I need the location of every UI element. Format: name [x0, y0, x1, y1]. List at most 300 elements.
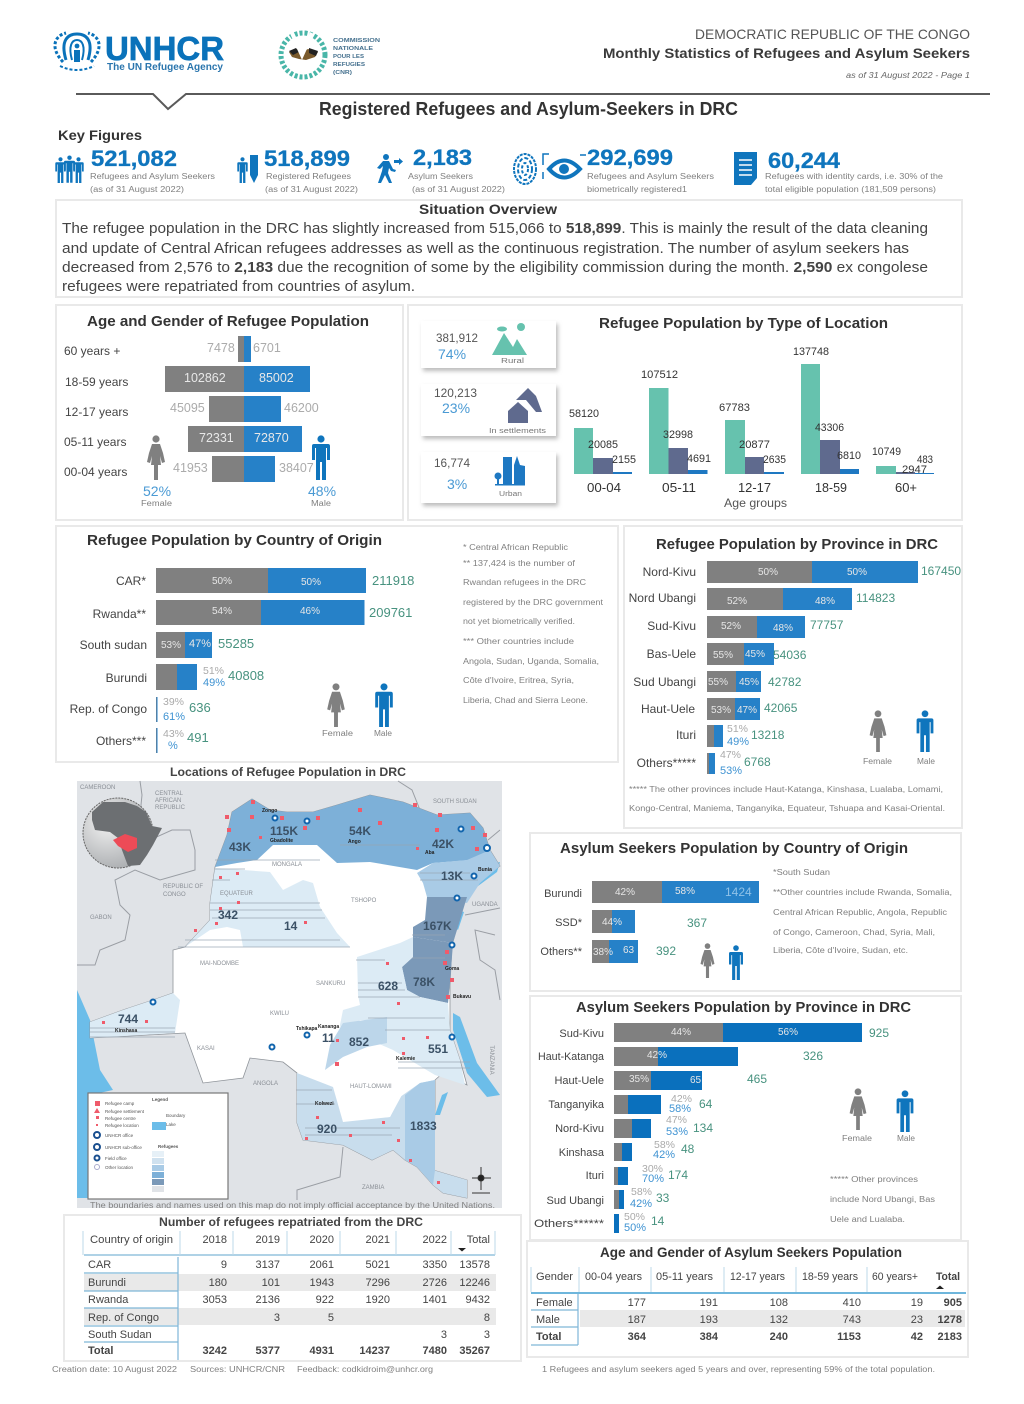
bar chart	[70, 568, 414, 753]
values: 174	[668, 1168, 688, 1182]
pyramid values: 72331	[199, 431, 234, 445]
table rows: 3	[274, 1312, 280, 1324]
table rows: 1943	[310, 1277, 334, 1289]
table totals: 14237	[359, 1345, 390, 1357]
card: rural	[421, 321, 558, 371]
table	[531, 1267, 966, 1345]
age group axis: 00-04	[587, 480, 621, 495]
key figure: identity cards: 60,244	[768, 148, 841, 173]
card: rural: 74%	[438, 346, 466, 362]
heading: situation overview: Situation Overview	[419, 201, 557, 217]
country borders	[77, 781, 500, 1200]
table header: 60 years+	[872, 1271, 918, 1283]
percentages: 39%	[163, 696, 184, 708]
table rows: 108	[770, 1297, 788, 1309]
footer	[52, 1365, 433, 1374]
country and province names: TSHOPO	[351, 898, 377, 904]
percentages: 51%	[203, 665, 224, 677]
table rows: 384	[700, 1331, 719, 1343]
row labels: Haut-Uele	[554, 1075, 604, 1087]
age labels: 60 years +	[64, 344, 120, 358]
heading: Number of refugees repatriated from the DRC	[159, 1215, 423, 1229]
row labels: Sud Ubangi	[546, 1195, 604, 1207]
footnote: include Nord Ubangi, Bas	[830, 1195, 935, 1204]
age labels: 00-04 years	[64, 465, 127, 479]
map legend	[88, 1093, 228, 1199]
table rows: 2183	[938, 1331, 962, 1343]
key figure: asylum seekers: Asylum Seekers	[408, 172, 473, 181]
key figure: refugees	[237, 146, 358, 194]
pyramid values: 45095	[170, 401, 205, 415]
card: urban: Urban	[499, 491, 522, 498]
gender icons	[700, 943, 743, 980]
values: 42065	[764, 701, 798, 715]
percentages: 53%	[666, 1126, 688, 1138]
site names: Aba	[425, 850, 435, 856]
table header: Total	[467, 1234, 490, 1246]
site names: Bunia	[478, 867, 492, 873]
bar values: 4691	[687, 453, 711, 465]
card: in settlements: 120,213	[434, 386, 477, 400]
table rows: 5021	[366, 1259, 390, 1271]
values: 64	[699, 1097, 713, 1111]
country and province names: AFRICAN	[155, 798, 181, 804]
age group axis	[587, 480, 917, 510]
pyramid values: 46200	[284, 401, 319, 415]
key figure: total: Refugees and Asylum Seekers	[90, 172, 215, 181]
values: 925	[869, 1026, 889, 1040]
key figure: asylum seekers	[377, 145, 505, 194]
site names: Kinshasa	[115, 1028, 137, 1034]
footnote: Kongo-Central, Maniema, Tanganyika, Equateur, Tshuapa and Kasai-Oriental.	[629, 804, 945, 813]
bar chart	[629, 561, 961, 777]
table totals: 4931	[310, 1345, 334, 1357]
row labels: Sud Ubangi	[633, 675, 696, 689]
table rows: 132	[770, 1314, 788, 1326]
percentages	[161, 576, 321, 752]
population labels: 11	[322, 1031, 335, 1045]
table rows: Burundi	[88, 1277, 126, 1289]
table header: 18-59 years	[802, 1271, 858, 1283]
compass	[472, 1167, 491, 1193]
footnote	[830, 1175, 935, 1224]
population labels: 920	[317, 1122, 337, 1136]
map legend: Legend	[152, 1097, 168, 1102]
table rows: 3137	[256, 1259, 280, 1271]
table rows: South Sudan	[88, 1329, 152, 1341]
percentages: 58%	[669, 1103, 691, 1115]
percentages: 42%	[647, 1050, 667, 1061]
CNR name: (CNR)	[333, 70, 352, 76]
header text: Monthly Statistics of Refugees and Asylum Seekers	[603, 45, 970, 61]
gender shares: 48%	[308, 483, 336, 499]
percentages: 47%	[737, 705, 757, 716]
country and province names: GABON	[90, 915, 112, 921]
population labels: 115K	[270, 824, 298, 838]
table totals: 7480	[423, 1345, 447, 1357]
pyramid values: 102862	[184, 371, 226, 385]
gender legend	[842, 1088, 916, 1143]
icon: walking person	[377, 154, 403, 183]
table rows: 2061	[310, 1259, 334, 1271]
percentages: 42%	[653, 1149, 675, 1161]
percentages and values: 38%	[593, 947, 613, 958]
gender shares: Female	[141, 499, 173, 508]
gender legend	[863, 710, 936, 766]
percentages and values: 367	[687, 916, 707, 930]
population labels: 744	[118, 1012, 138, 1026]
country and province names: REPUBLIC OF	[163, 884, 203, 890]
footnotes: * Central African Republic	[463, 543, 568, 552]
values	[744, 564, 961, 769]
percentages: 50%	[847, 567, 867, 578]
age labels: 18-59 years	[65, 375, 128, 389]
row labels	[70, 574, 147, 748]
population labels: 628	[378, 979, 398, 993]
percentages: 55%	[713, 650, 733, 661]
values: 465	[747, 1072, 767, 1086]
percentages and values: 1424	[725, 885, 752, 899]
pyramid values: 6701	[253, 341, 281, 355]
heading: Age and Gender of Asylum Seekers Population	[600, 1244, 902, 1260]
table rows: 42	[911, 1331, 923, 1343]
table rows: 193	[700, 1314, 718, 1326]
population labels: 54K	[349, 824, 371, 838]
row labels: Others***	[96, 734, 146, 748]
age group axis: 18-59	[815, 480, 847, 495]
country and province names: KWILU	[270, 1011, 289, 1017]
table header: 2021	[366, 1234, 390, 1246]
gender shares	[141, 483, 336, 508]
icon: city	[494, 456, 525, 486]
table rows: 2726	[423, 1277, 447, 1289]
values: 211918	[372, 573, 414, 588]
table totals: 35267	[459, 1345, 490, 1357]
row labels: Kinshasa	[559, 1147, 605, 1159]
card: in settlements	[421, 384, 558, 439]
values: 491	[187, 730, 209, 745]
UNHCR logo	[55, 30, 224, 73]
values: 54036	[773, 648, 807, 662]
map legend: Refugees	[158, 1144, 179, 1149]
table rows: 3	[441, 1329, 447, 1341]
country and province names: CENTRAL	[155, 791, 184, 797]
table rows: 240	[770, 1331, 788, 1343]
gender legend: Male	[374, 729, 393, 738]
percentages: 51%	[727, 723, 748, 735]
percentages: 50%	[624, 1222, 646, 1234]
bar chart	[540, 881, 759, 963]
heading: Asylum Seekers Population by Country of Origin	[560, 840, 908, 857]
values: 114823	[856, 591, 895, 605]
icon: fingerprint	[514, 154, 536, 184]
table rows: 2136	[256, 1294, 280, 1306]
panel: asylum seekers by province	[530, 996, 961, 1240]
row labels: Nord-Kivu	[555, 1123, 604, 1135]
values: 77757	[810, 618, 844, 632]
sud-kivu	[402, 937, 453, 1003]
table header	[90, 1234, 490, 1252]
site names: Tshikapa	[296, 1026, 318, 1032]
ituri	[417, 850, 500, 903]
percentages: 65	[690, 1075, 702, 1086]
table rows: 364	[628, 1331, 647, 1343]
panel: asylum seekers by country of origin	[530, 833, 961, 991]
values: 134	[693, 1121, 713, 1135]
icon: document	[734, 152, 757, 185]
CNR name	[333, 38, 380, 76]
situation text: decreased from 2,576 to 2,183 due the recognition of some by the eligibility commission during the month. 2,590 ex congolese	[62, 259, 928, 276]
table header	[536, 1271, 960, 1289]
footnotes	[773, 868, 952, 955]
percentages and values: 44%	[602, 917, 622, 928]
row labels: Haut-Uele	[641, 702, 695, 716]
card: in settlements: 23%	[442, 400, 470, 416]
map: refugee locations	[77, 781, 502, 1210]
site names: Bukavu	[453, 994, 471, 1000]
key figure: total: (as of 31 August 2022)	[90, 185, 184, 194]
percentages: 35%	[629, 1074, 649, 1085]
row labels: Others******	[534, 1218, 605, 1230]
row labels: Nord Ubangi	[629, 591, 696, 605]
table rows: 23	[911, 1314, 923, 1326]
icon: people	[55, 155, 84, 183]
population labels: 1833	[410, 1119, 437, 1133]
values: 42782	[768, 675, 802, 689]
footer: Creation date: 10 August 2022	[52, 1365, 178, 1374]
row labels: Nord-Kivu	[643, 565, 696, 579]
population labels: 852	[349, 1035, 369, 1049]
gender legend: Female	[842, 1134, 873, 1143]
row labels	[534, 1028, 605, 1230]
percentages: 52%	[721, 621, 741, 632]
table rows: Male	[536, 1314, 560, 1326]
DRC outline	[90, 795, 500, 1198]
icon: mountains	[492, 323, 527, 355]
gender legend: Female	[863, 757, 893, 766]
sankuru	[325, 1017, 387, 1070]
percentages: 30%	[642, 1163, 663, 1175]
percentages: 56%	[778, 1027, 798, 1038]
footnotes: not yet biometrically verified.	[463, 617, 575, 626]
table rows: 1920	[366, 1294, 390, 1306]
row labels: Sud-Kivu	[559, 1028, 604, 1040]
bar chart: location by age group	[569, 346, 934, 510]
UNHCR wordmark: UNHCR	[105, 30, 224, 67]
gender legend: Male	[917, 757, 936, 766]
table header: 00-04 years	[585, 1271, 642, 1283]
percentages: 42%	[630, 1198, 652, 1210]
percentages: 49%	[727, 736, 749, 748]
card: in settlements: In settlements	[489, 428, 547, 435]
country and province names: HAUT-LOMAMI	[350, 1084, 392, 1090]
panel: age and gender of refugee population	[56, 305, 403, 520]
population labels: 43K	[229, 840, 251, 854]
percentages: 43%	[163, 728, 184, 740]
table rows: 187	[628, 1314, 646, 1326]
icon: registered refugee	[237, 155, 258, 183]
bar values: 2947	[902, 464, 927, 476]
footnotes: registered by the DRC government	[463, 598, 604, 607]
country and province names: KASAI	[197, 1046, 215, 1052]
site names: Zongo	[262, 808, 277, 814]
country and province names: ANGOLA	[253, 1081, 278, 1087]
table rows: CAR	[88, 1259, 111, 1271]
bar values: 20085	[588, 439, 618, 451]
values: 14	[651, 1214, 665, 1228]
percentages: 61%	[163, 711, 185, 723]
CNR name: REFUGIES	[333, 62, 365, 68]
values: 40808	[228, 668, 264, 683]
table header: Total	[936, 1271, 960, 1283]
pyramid values	[170, 341, 319, 475]
key figure: biometrically registered: 292,699	[587, 145, 673, 170]
situation text: and update of Central African refugees addresses as well as the continuous registration. The number of asylum seekers has	[62, 240, 909, 257]
key figure: total	[55, 146, 215, 194]
map legend: Refugee camp	[105, 1101, 135, 1106]
row labels	[540, 888, 583, 958]
panel: refugee population by type of location	[408, 305, 962, 520]
footnotes: Liberia, Côte d'Ivoire, Sudan, etc.	[773, 946, 908, 955]
heading: Refugee Population by Country of Origin	[87, 532, 382, 549]
table header: 2022	[423, 1234, 447, 1246]
percentages and values: 392	[656, 944, 676, 958]
footnote	[629, 785, 945, 813]
percentages and values: 58%	[675, 886, 695, 897]
bar values: 32998	[663, 429, 693, 441]
table rows: 3	[484, 1329, 490, 1341]
globe inset	[83, 798, 162, 868]
gender shares: 52%	[143, 483, 171, 499]
maniema and south kivu fringe	[340, 937, 465, 1085]
table totals: 3242	[203, 1345, 227, 1357]
site names	[115, 808, 492, 1107]
map legend: Lake	[166, 1122, 176, 1127]
table header: 12-17 years	[730, 1271, 785, 1283]
horizontal label strokes	[90, 845, 478, 1135]
percentages and values: 42%	[615, 887, 635, 898]
gender shares: Male	[311, 499, 332, 508]
age group axis: 12-17	[738, 480, 771, 495]
key figure: refugees: (as of 31 August 2022)	[265, 185, 358, 194]
icon: male	[312, 435, 330, 480]
key figure: total: 521,082	[91, 146, 177, 171]
centre unserved province	[337, 1047, 417, 1120]
map legend: Refugee location	[105, 1123, 139, 1128]
card: urban: 3%	[447, 476, 467, 492]
percentages: 47%	[189, 638, 211, 650]
table rows: 9432	[466, 1294, 490, 1306]
bar values: 58120	[569, 408, 599, 420]
bar values	[569, 346, 933, 476]
percentages: 50%	[758, 567, 778, 578]
values: 209761	[369, 605, 412, 620]
gender legend	[322, 683, 393, 738]
percentages	[708, 567, 867, 777]
values: 33	[656, 1191, 670, 1205]
country and province names	[80, 785, 498, 1191]
header rule with notch	[76, 94, 990, 109]
table rows	[88, 1259, 490, 1341]
row labels: Ituri	[586, 1170, 604, 1182]
site names: Ango	[348, 839, 361, 845]
table rows: 180	[209, 1277, 227, 1289]
heading: Age and Gender of Refugee Population	[87, 313, 369, 330]
heading: Asylum Seekers Population by Province in DRC	[576, 999, 911, 1016]
percentages: 47%	[666, 1114, 687, 1126]
age labels: 05-11 years	[64, 435, 126, 449]
table rows: 3350	[423, 1259, 447, 1271]
row labels: SSD*	[555, 917, 583, 929]
pyramid values: 85002	[259, 371, 294, 385]
map legend: Other location	[105, 1165, 134, 1170]
icon: female	[147, 435, 165, 480]
key figure: biometrically registered: biometrically registered1	[587, 185, 688, 194]
site names: Gbadolite	[270, 838, 293, 844]
footnote: Uele and Lualaba.	[830, 1215, 905, 1224]
table rows: 12246	[459, 1277, 490, 1289]
table	[83, 1231, 496, 1360]
footnotes: Rwandan refugees in the DRC	[463, 578, 586, 587]
bar values: 67783	[719, 402, 750, 414]
key figure: identity cards	[734, 148, 944, 194]
population labels: 13K	[441, 869, 463, 883]
row labels: Rep. of Congo	[70, 702, 147, 716]
row labels	[629, 565, 696, 770]
values: 167450	[921, 564, 961, 578]
key figure: biometrically registered	[514, 145, 714, 194]
population labels: 551	[428, 1042, 448, 1056]
pyramid bars	[165, 336, 310, 482]
row labels: Burundi	[106, 671, 147, 685]
population labels: 78K	[413, 975, 435, 989]
katanga provinces	[297, 1073, 467, 1198]
row labels: CAR*	[116, 574, 146, 588]
table rows	[536, 1297, 962, 1343]
heading: key figures: Key Figures	[58, 127, 142, 143]
map legend: Refugee settlement	[105, 1109, 145, 1114]
table rows: 905	[944, 1297, 962, 1309]
table rows: 1401	[423, 1294, 447, 1306]
values	[187, 573, 414, 745]
card: urban: 16,774	[434, 456, 470, 470]
country and province names: CONGO	[163, 892, 186, 898]
heading: Refugee Population by Type of Location	[599, 315, 888, 332]
country and province names: EQUATEUR	[220, 891, 254, 897]
pyramid values: 72870	[254, 431, 289, 445]
markers: UNHCR offices	[150, 816, 490, 1050]
values: 48	[681, 1142, 695, 1156]
percentages: 49%	[203, 677, 225, 689]
table totals: 5377	[256, 1345, 280, 1357]
nord-kivu	[413, 897, 467, 943]
row labels: Sud-Kivu	[647, 619, 696, 633]
row labels: Rwanda**	[93, 607, 146, 621]
footnote: ***** Other provinces	[830, 1175, 918, 1184]
panel: age and gender of asylum seekers table	[527, 1241, 968, 1357]
situation text: The refugee population in the DRC has slightly increased from 515,066 to 518,899. This is mainly the result of the data cleaning	[62, 220, 928, 237]
footnote: ***** The other provinces include Haut-Katanga, Kinshasa, Lualaba, Lomami,	[629, 785, 943, 794]
table rows: 101	[262, 1277, 280, 1289]
table rows: 8	[484, 1312, 490, 1324]
header text	[603, 26, 970, 80]
north provinces	[215, 795, 490, 870]
population labels: 14	[284, 919, 298, 933]
population labels: 42K	[432, 837, 454, 851]
values: 326	[803, 1049, 823, 1063]
map disclaimer: The boundaries and names used on this map do not imply official acceptance by the United Nations.	[90, 1201, 495, 1210]
row labels: Haut-Katanga	[538, 1051, 605, 1063]
